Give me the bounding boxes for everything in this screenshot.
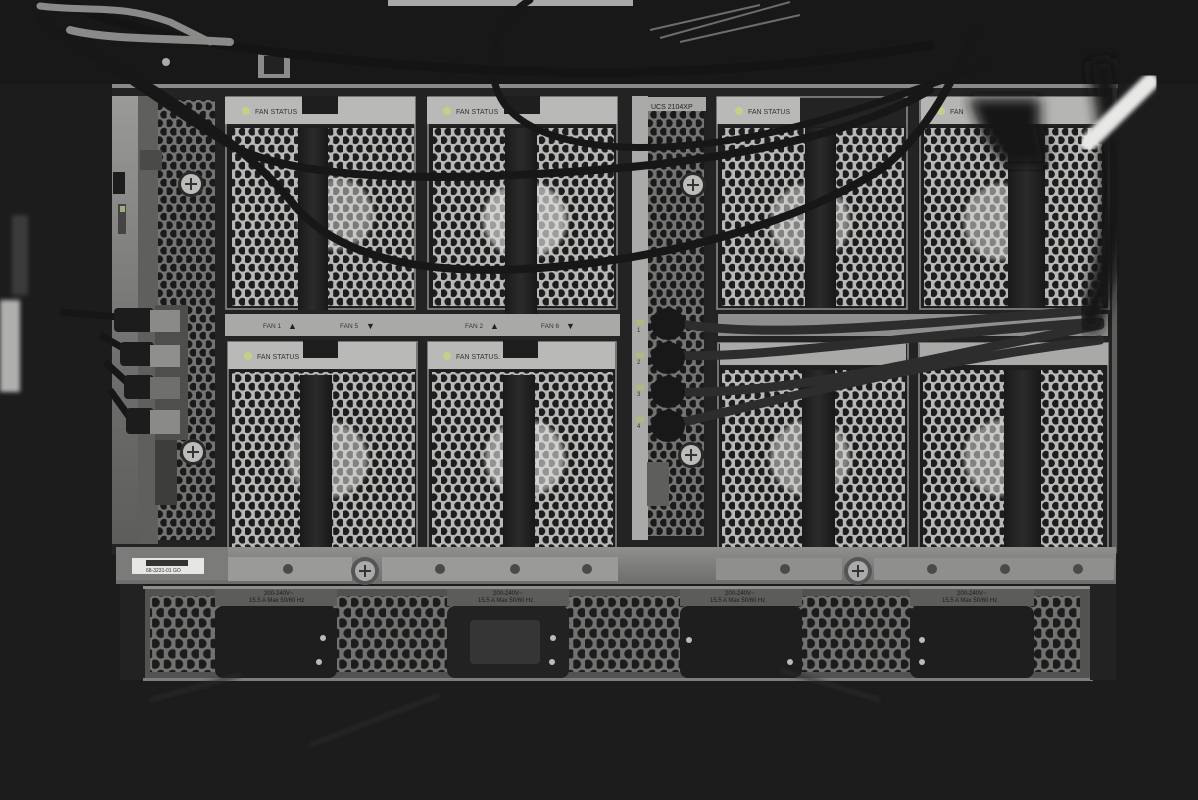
power socket 2 [447, 589, 569, 678]
icon: bar thumbscrew left [351, 557, 379, 585]
center module [632, 96, 708, 540]
port status lights [636, 320, 644, 430]
fan tray 4: FAN [950, 109, 964, 116]
fan indicator strip: FAN 6 [541, 323, 559, 330]
left cable connectors [60, 305, 188, 505]
power socket 2: 15.5 A Max 50/60 Hz [478, 598, 533, 604]
icon: left thumbscrew bottom [180, 439, 206, 465]
power socket 3: 200-240V~ [725, 591, 755, 597]
blurred left foreground light strip [0, 215, 28, 392]
fan tray 5: FAN STATUS [257, 354, 299, 361]
port connectors [651, 308, 685, 442]
bottom bar [116, 547, 1116, 585]
fan indicator strip: ▲ [490, 321, 499, 331]
fan tray 2: FAN STATUS [456, 109, 498, 116]
fan tray 6: FAN STATUS. [456, 354, 500, 361]
top equipment shadow band [0, 0, 1198, 84]
blurred white cable foreground [1088, 82, 1150, 143]
fan tray 7 [716, 343, 908, 558]
fan indicator strip: ▲ [288, 321, 297, 331]
power socket 3 [680, 589, 802, 678]
grey cables top left [40, 6, 230, 42]
fan indicator strip: ▼ [566, 321, 575, 331]
chassis [112, 84, 1118, 555]
icon: bar thumbscrew right [844, 557, 872, 585]
right dark vertical cable [1085, 60, 1115, 330]
fan tray 3: FAN STATUS [748, 109, 790, 116]
power socket 1: 15.5 A Max 50/60 Hz [249, 598, 304, 604]
left module [60, 96, 215, 544]
fan indicator strip: FAN 1 [263, 323, 281, 330]
fan tray row 2 [226, 340, 1110, 559]
black overhead cables [40, 0, 985, 270]
fan indicator strip [225, 314, 1108, 336]
fan tray 5 [226, 340, 418, 557]
fan indicator strip: FAN 5 [340, 323, 358, 330]
fan tray 1: FAN STATUS [255, 109, 297, 116]
power socket 4: 15.5 A Max 50/60 Hz [942, 598, 997, 604]
power socket 1: 200-240V~ [264, 591, 294, 597]
icon: center thumbscrew bottom [678, 442, 704, 468]
port status lights: 4 [637, 424, 641, 430]
power socket 4: 200-240V~ [957, 591, 987, 597]
power socket 1 [215, 589, 337, 678]
fan indicator strip: FAN 2 [465, 323, 483, 330]
port cables right [670, 310, 1100, 425]
port status lights: 2 [637, 360, 641, 366]
lower floor reflections [150, 670, 880, 745]
barcode label [132, 558, 204, 574]
fan tray 2 [427, 96, 617, 316]
fan tray row 1 [225, 96, 1110, 316]
power socket 2: 200-240V~ [493, 591, 523, 597]
fan tray 4 [918, 97, 1110, 309]
icon: center thumbscrew top [680, 172, 706, 198]
power socket 4 [910, 589, 1034, 678]
fan tray 8 [918, 343, 1110, 558]
fan tray 6 [426, 340, 618, 559]
port status lights: 3 [637, 392, 641, 398]
center module: UCS 2104XP [651, 104, 693, 111]
port status lights: 1 [637, 328, 641, 334]
fan tray 1 [225, 96, 415, 310]
power socket 3: 15.5 A Max 50/60 Hz [710, 598, 765, 604]
power supply panel [120, 584, 1116, 681]
fan tray 3 [716, 97, 908, 309]
icon: left thumbscrew top [178, 171, 204, 197]
fan indicator strip: ▼ [366, 321, 375, 331]
barcode label: 68-3231-01 GO [146, 568, 181, 574]
